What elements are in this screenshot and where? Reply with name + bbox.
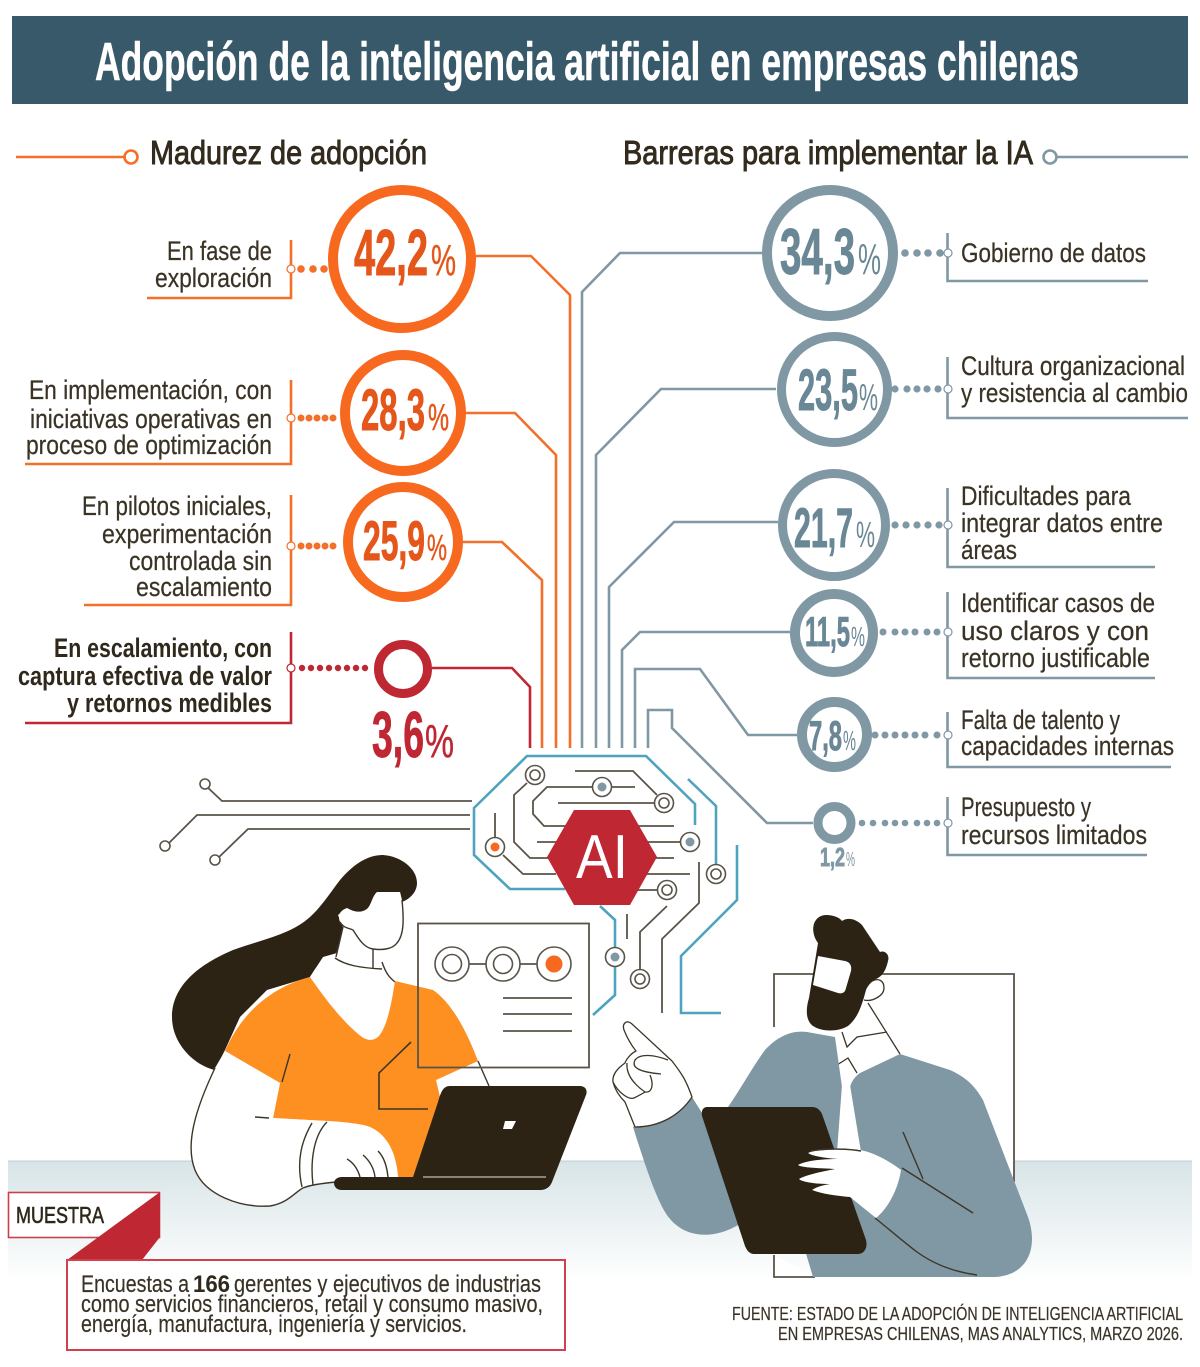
- AI brain circuit: [474, 756, 737, 1015]
- dark traces: [575, 771, 657, 795]
- tablet: [702, 1107, 867, 1254]
- left arm: [633, 1097, 760, 1235]
- item: 21,7% integrar datos: 21,7: [794, 496, 853, 559]
- sample description box: energía, manufactura, ingeniería y servicios.: [81, 1311, 467, 1338]
- AI hexagon: AI: [576, 823, 628, 892]
- panel: maturity items: [18, 190, 471, 771]
- item: 11,5% casos de uso: [795, 588, 1155, 678]
- sleeve and arm: [191, 1051, 398, 1206]
- item: 28,3% implementación: iniciativas operativas en: [30, 404, 272, 434]
- blue traces: [474, 756, 695, 889]
- item: 11,5% casos de uso: retorno justificable: [961, 643, 1150, 673]
- floor band: [8, 1160, 1192, 1281]
- item: 3,6% escalamiento: y retornos medibles: [67, 688, 272, 718]
- item: 25,9% pilotos: [82, 487, 458, 605]
- item: 21,7% integrar datos: integrar datos entre: [961, 508, 1163, 538]
- item: 42,2% exploración: 42,2: [354, 216, 428, 289]
- item: 21,7% integrar datos: Dificultades para: [961, 481, 1132, 511]
- body: [728, 1032, 1032, 1277]
- man illustration: [613, 915, 1032, 1277]
- item: 28,3% implementación: 28,3: [361, 378, 425, 443]
- circuit nodes: [486, 766, 726, 988]
- callout: MUESTRA: MUESTRA: [16, 1202, 105, 1228]
- sample description box: como servicios financieros, retail y consumo masivo,: [81, 1291, 543, 1318]
- item: 3,6% escalamiento: 3,6: [372, 698, 424, 771]
- sample description box: [67, 1260, 565, 1350]
- item: 25,9% pilotos: experimentación: [102, 519, 272, 549]
- item: 28,3% implementación: proceso de optimización: [26, 430, 272, 460]
- neck and collar: [835, 1003, 900, 1087]
- face and neck: [310, 892, 403, 1041]
- item: 21,7% integrar datos: áreas: [961, 535, 1017, 565]
- item: 34,3% gobierno de datos: 34,3: [780, 215, 855, 288]
- item: 25,9% pilotos: %: [427, 527, 447, 568]
- item: 3,6% escalamiento: [18, 632, 454, 771]
- sample description box: 166: [193, 1271, 230, 1298]
- callout: MUESTRA: [8, 1192, 160, 1260]
- item: 21,7% integrar datos: [782, 474, 1163, 576]
- item: 34,3% gobierno de datos: [767, 190, 1148, 316]
- AI hexagon: [547, 810, 657, 905]
- item: 11,5% casos de uso: %: [851, 621, 865, 652]
- item: 1,2% presupuesto: recursos limitados: [961, 820, 1147, 850]
- item: 11,5% casos de uso: 11,5: [805, 608, 850, 655]
- item: 3,6% escalamiento: %: [425, 715, 454, 767]
- item: 7,8% talento: 7,8: [809, 712, 842, 759]
- item: 34,3% gobierno de datos: %: [858, 235, 881, 284]
- item: 23,5% cultura organizacional: 23,5: [798, 358, 858, 423]
- item: 34,3% gobierno de datos: Gobierno de datos: [961, 238, 1146, 268]
- connector lines from maturity rings to AI chip: [432, 256, 570, 748]
- hair: [172, 855, 417, 1070]
- panel: barrier items: [767, 190, 1188, 872]
- item: 11,5% casos de uso: uso claros y con: [961, 616, 1149, 646]
- man's background frame: [774, 974, 1014, 1277]
- heading: Madurez de adopción: [16, 134, 427, 171]
- document panel: [418, 924, 589, 1068]
- item: 42,2% exploración: En fase de: [167, 236, 272, 266]
- item: 7,8% talento: [802, 702, 1174, 767]
- item: 3,6% escalamiento: captura efectiva de valor: [18, 661, 272, 691]
- item: 42,2% exploración: exploración: [155, 263, 272, 293]
- item: 25,9% pilotos: escalamiento: [136, 572, 272, 602]
- sample description box: Encuestas a: [81, 1271, 190, 1298]
- face: [813, 956, 851, 993]
- item: 25,9% pilotos: En pilotos iniciales,: [82, 491, 272, 521]
- hair and beard: [807, 915, 888, 1030]
- item: 1,2% presupuesto: [818, 792, 1147, 872]
- sample description box: gerentes y ejecutivos de industrias: [234, 1271, 541, 1298]
- item: 7,8% talento: %: [843, 725, 856, 756]
- title banner: [12, 16, 1188, 104]
- item: 11,5% casos de uso: Identificar casos de: [961, 588, 1155, 618]
- item: 42,2% exploración: %: [431, 236, 456, 285]
- ear: [864, 980, 884, 1000]
- item: 7,8% talento: Falta de talento y: [961, 705, 1120, 735]
- item: 1,2% presupuesto: 1,2: [820, 842, 845, 872]
- item: 28,3% implementación: En implementación, con: [29, 375, 272, 405]
- item: 1,2% presupuesto: Presupuesto y: [961, 792, 1091, 822]
- item: 28,3% implementación: %: [428, 397, 449, 439]
- item: 28,3% implementación: [25, 355, 461, 471]
- heading: Barreras para implementar la IA: Barreras para implementar la IA: [623, 134, 1033, 171]
- hand on tablet: [798, 1149, 901, 1218]
- item: 25,9% pilotos: controlada sin: [129, 546, 272, 576]
- pointing hand: [613, 1022, 692, 1127]
- laptop: [334, 1086, 587, 1190]
- item: 25,9% pilotos: 25,9: [363, 509, 425, 572]
- item: 42,2% exploración: [147, 190, 471, 328]
- item: 23,5% cultura organizacional: %: [859, 377, 878, 419]
- item: 23,5% cultura organizacional: [782, 336, 1188, 442]
- connector lines from barrier rings to AI chip: [582, 253, 813, 823]
- source note: [732, 1303, 1183, 1344]
- item: 3,6% escalamiento: En escalamiento, con: [54, 633, 272, 663]
- item: 21,7% integrar datos: %: [856, 514, 875, 555]
- heading: Madurez de adopción: Madurez de adopción: [150, 134, 427, 171]
- woman illustration: [172, 855, 489, 1206]
- circuit wires at left: [160, 779, 472, 865]
- tie: [837, 1085, 861, 1152]
- orange shirt: [225, 977, 478, 1177]
- item: 1,2% presupuesto: %: [846, 849, 855, 871]
